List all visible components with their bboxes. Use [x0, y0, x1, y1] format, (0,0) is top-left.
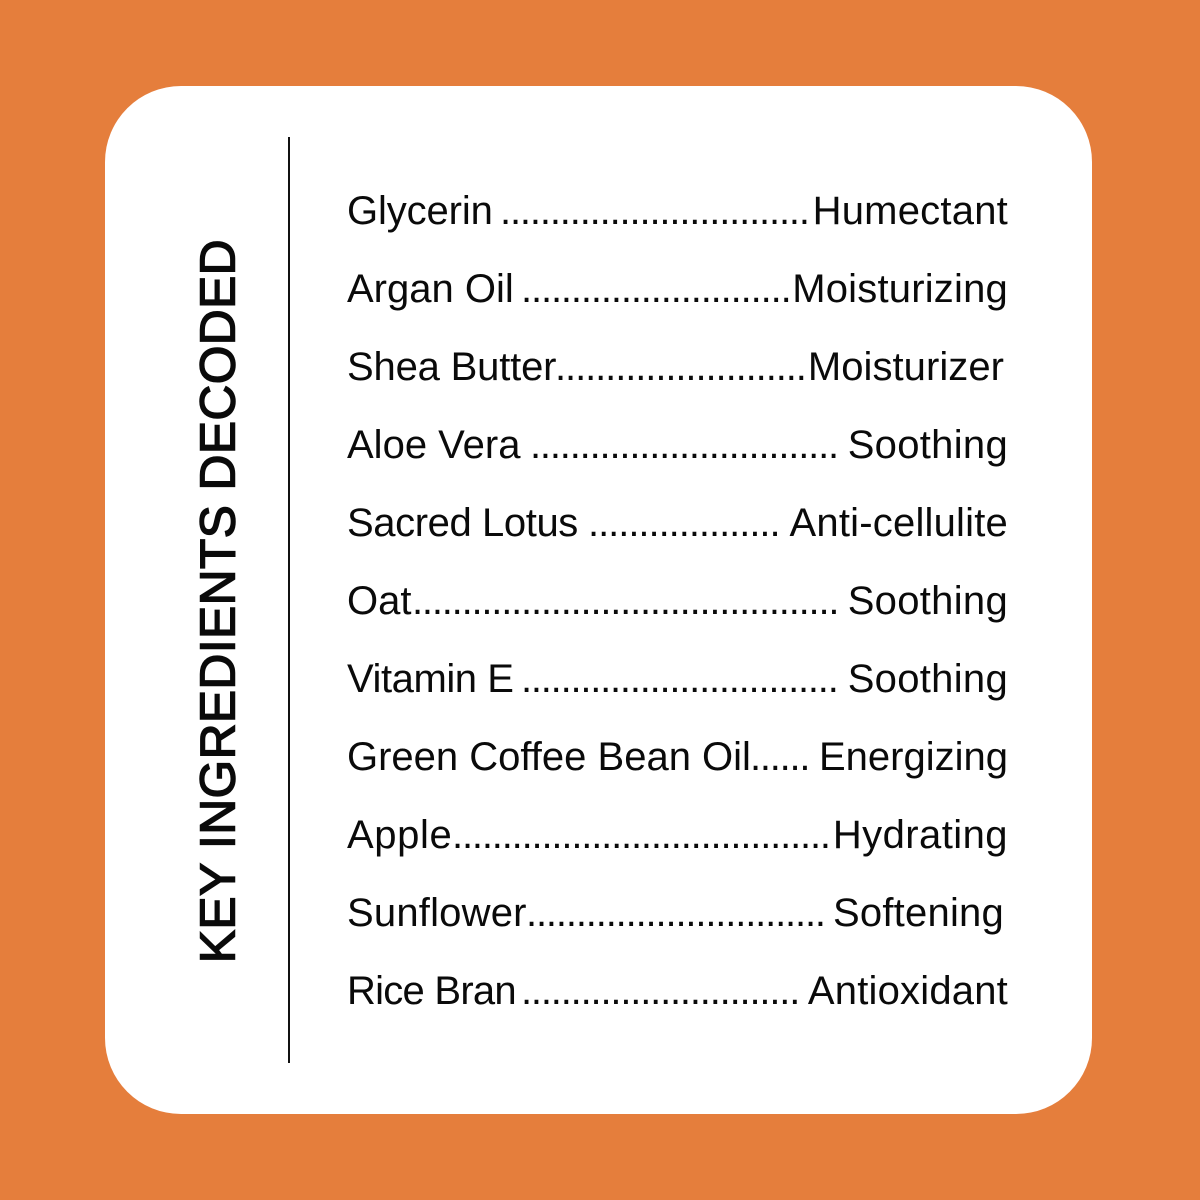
- row: Apple: Apple: [347, 813, 452, 857]
- row: Argan Oil: ...........................: [521, 267, 791, 311]
- row: Oat: Oat: [347, 579, 411, 623]
- row: Vitamin E: ................................: [521, 657, 838, 701]
- row: Argan Oil: Argan Oil: [347, 267, 514, 311]
- row: Rice Bran: [347, 969, 1008, 1013]
- row: Apple: Hydrating: [833, 813, 1008, 857]
- title: key ingredients decoded: KEY INGREDIENTS DECODED: [190, 239, 245, 963]
- divider line: [288, 137, 290, 1063]
- row: Green Coffee Bean Oil: [347, 735, 1008, 779]
- panel: ingredients card: [105, 86, 1092, 1114]
- row: Glycerin: ...............................: [500, 189, 809, 233]
- row: Shea Butter: .........................: [555, 345, 806, 389]
- row: Apple: ......................................: [452, 813, 830, 857]
- row: Green Coffee Bean Oil: Green Coffee Bean Oil: [347, 735, 751, 779]
- row: Vitamin E: Vitamin E: [347, 657, 514, 701]
- row: Aloe Vera: [347, 423, 1008, 467]
- row: Glycerin: Glycerin: [347, 189, 493, 233]
- row: Oat: [347, 579, 1008, 623]
- row: Argan Oil: Moisturizing: [792, 267, 1008, 311]
- row: Oat: ...........................................: [412, 579, 838, 623]
- row: Sunflower: Softening: [833, 891, 1004, 935]
- row: Rice Bran: Rice Bran: [347, 969, 516, 1013]
- row: Aloe Vera: Aloe Vera: [347, 423, 520, 467]
- row: Sacred Lotus: [347, 501, 1008, 545]
- row: Glycerin: Humectant: [813, 189, 1008, 233]
- row: Sunflower: ..............................: [526, 891, 825, 935]
- row: Shea Butter: Moisturizer: [808, 345, 1004, 389]
- row: Glycerin: [347, 189, 1008, 233]
- row: Sunflower: [347, 891, 1004, 935]
- row: Vitamin E: [347, 657, 1008, 701]
- row: Rice Bran: Antioxidant: [808, 969, 1008, 1013]
- row: Aloe Vera: ...............................: [530, 423, 838, 467]
- row: Vitamin E: Soothing: [848, 657, 1008, 701]
- row: Sunflower: Sunflower: [347, 891, 527, 935]
- row: Shea Butter: Shea Butter: [347, 345, 556, 389]
- row: Green Coffee Bean Oil: Energizing: [819, 735, 1008, 779]
- row: Green Coffee Bean Oil: ......: [750, 735, 809, 779]
- row: Apple: [347, 813, 1008, 857]
- row: Rice Bran: ............................: [521, 969, 799, 1013]
- row: Sacred Lotus: Anti-cellulite: [790, 501, 1008, 545]
- row: Shea Butter: [347, 345, 1004, 389]
- row: Argan Oil: [347, 267, 1008, 311]
- row: Sacred Lotus: ...................: [588, 501, 780, 545]
- row: Sacred Lotus: Sacred Lotus: [347, 501, 578, 545]
- row: Oat: Soothing: [848, 579, 1008, 623]
- row: Aloe Vera: Soothing: [848, 423, 1008, 467]
